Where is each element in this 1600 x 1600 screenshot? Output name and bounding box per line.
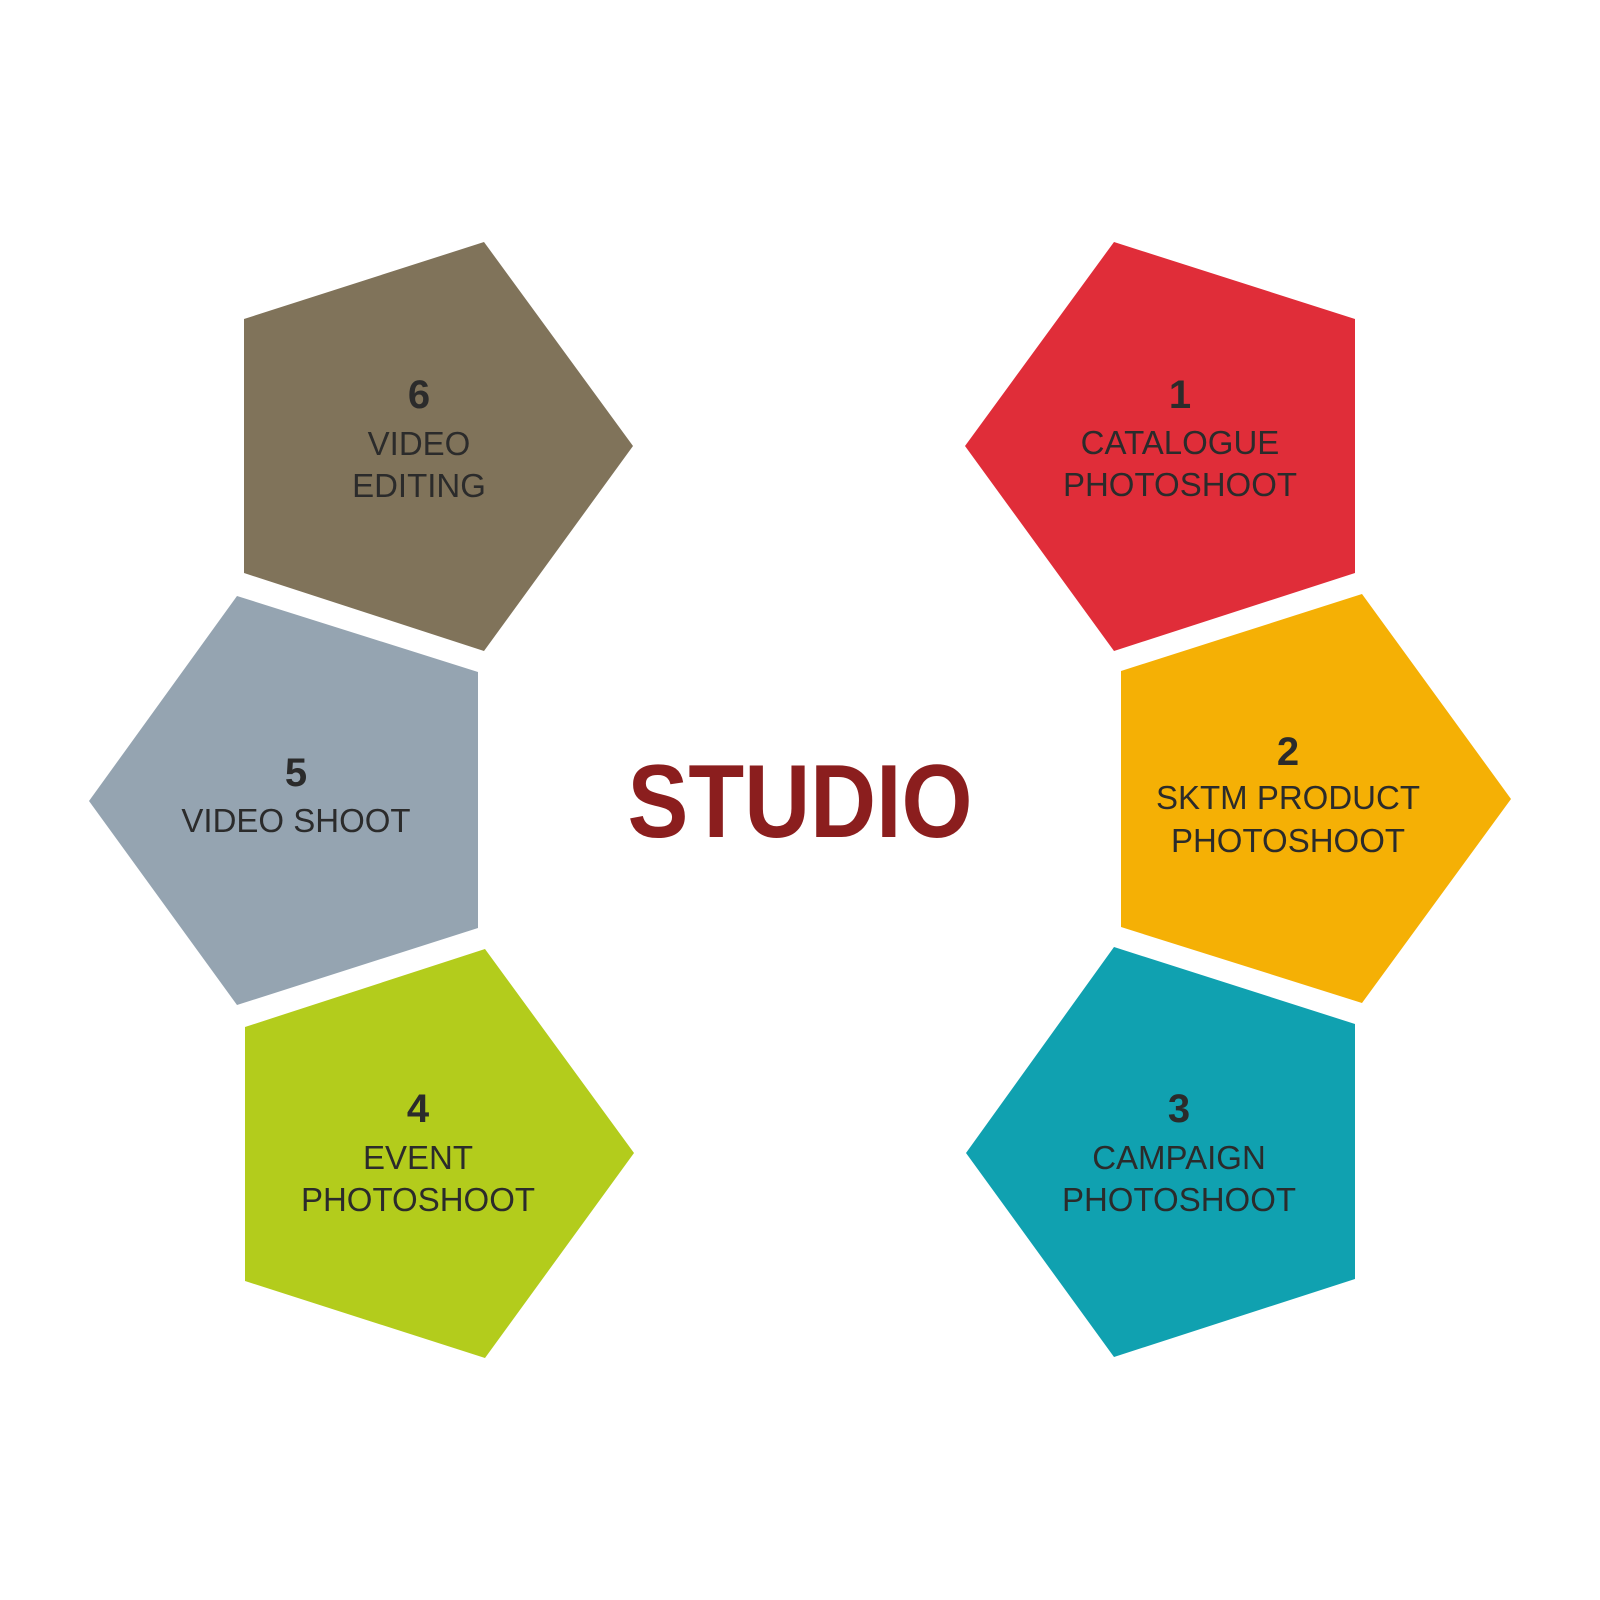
panel: 1 catalogue photoshoot: 1 (1169, 373, 1191, 417)
panel: 4 event photoshoot: EVENT (363, 1139, 473, 1176)
panel: 4 event photoshoot: 4 (407, 1087, 430, 1131)
panel: 2 sktm product photoshoot: SKTM PRODUCT (1156, 779, 1420, 816)
panel: 5 video shoot: 5 (285, 751, 307, 795)
panel: 6 video editing: EDITING (352, 467, 486, 504)
panel: 2 sktm product photoshoot (1121, 594, 1511, 1003)
panel: 1 catalogue photoshoot: PHOTOSHOOT (1063, 466, 1297, 503)
panel: 6 video editing: 6 (408, 373, 430, 417)
panel: 3 campaign photoshoot: 3 (1168, 1087, 1190, 1131)
panel: 6 video editing (244, 242, 633, 651)
panel: 4 event photoshoot: PHOTOSHOOT (301, 1181, 535, 1218)
panel: 3 campaign photoshoot (966, 947, 1355, 1357)
title: STUDIO: STUDIO (628, 744, 972, 860)
panel: 3 campaign photoshoot: CAMPAIGN (1092, 1139, 1266, 1176)
panel: 2 sktm product photoshoot: PHOTOSHOOT (1171, 822, 1405, 859)
panel: 1 catalogue photoshoot (965, 242, 1355, 651)
panel: 2 sktm product photoshoot: 2 (1277, 730, 1299, 774)
panel: 4 event photoshoot (245, 949, 634, 1358)
panel: 6 video editing: VIDEO (368, 425, 470, 462)
panel: 5 video shoot (89, 596, 478, 1005)
panel: 1 catalogue photoshoot: CATALOGUE (1081, 424, 1279, 461)
panel: 5 video shoot: VIDEO SHOOT (181, 802, 411, 839)
panel: 3 campaign photoshoot: PHOTOSHOOT (1062, 1181, 1296, 1218)
